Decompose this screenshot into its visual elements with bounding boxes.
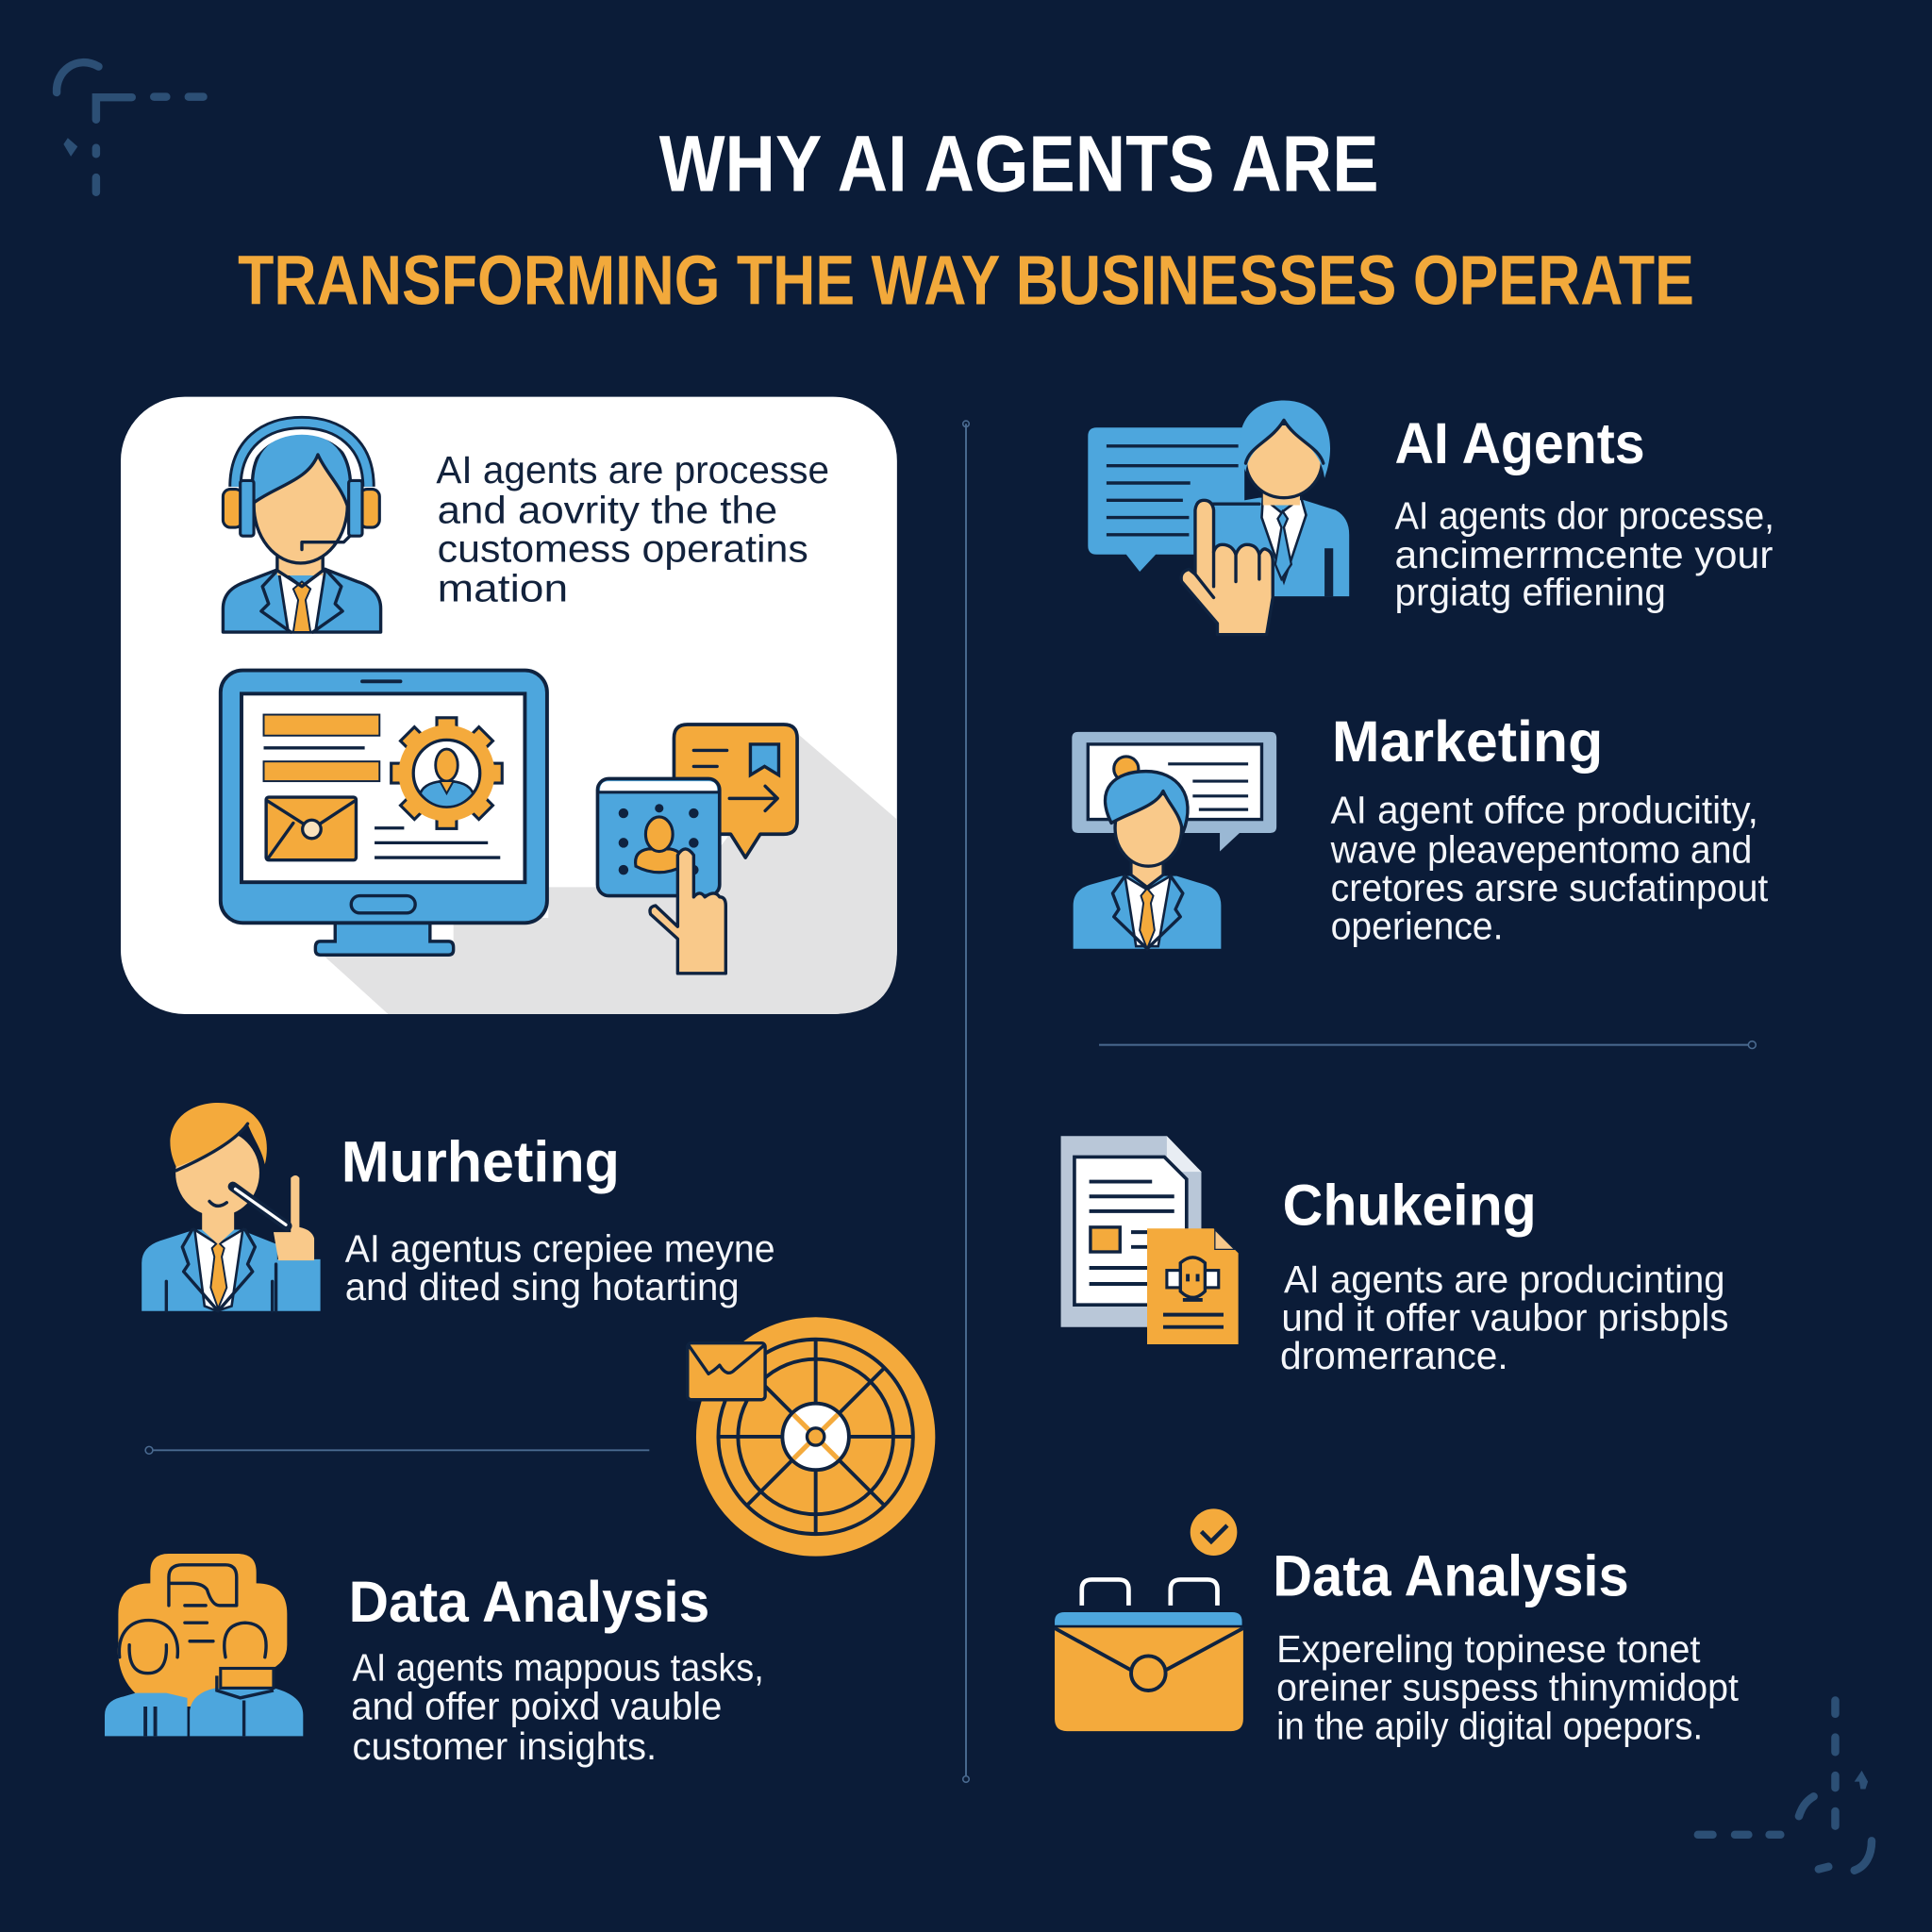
body text: and dited sing hotarting xyxy=(345,1265,740,1308)
body text: in the apily digital opepors. xyxy=(1276,1705,1703,1748)
body text: customer insights. xyxy=(353,1724,657,1768)
body text: operience. xyxy=(1331,904,1503,947)
body text: AI agentus crepiee meyne xyxy=(345,1226,775,1270)
card text: customess operatins xyxy=(438,527,808,571)
body text: cretores arsre sucfatinpout xyxy=(1331,866,1768,909)
vertical divider xyxy=(963,421,969,1782)
body text xyxy=(345,1226,775,1308)
body text: oreiner suspess thinymidopt xyxy=(1276,1665,1739,1708)
body text: prgiatg effiening xyxy=(1395,570,1666,613)
card text xyxy=(436,448,829,609)
card text: AI agents are processe xyxy=(436,448,829,491)
panel: Murheting xyxy=(142,1103,775,1311)
body text: AI agents mappous tasks, xyxy=(353,1646,764,1690)
icon: monitor xyxy=(221,671,547,955)
horizontal divider: right xyxy=(1099,1041,1756,1049)
card diagonal shadow xyxy=(323,734,897,1014)
body text: AI agent offce producitity, xyxy=(1331,788,1758,831)
body text: dromerrance. xyxy=(1280,1334,1508,1377)
icon: team with document xyxy=(105,1554,303,1736)
title xyxy=(238,118,1694,320)
heading: Chukeing xyxy=(1283,1173,1537,1238)
panel: AI Agents xyxy=(1088,400,1774,635)
body text: and offer poixd vauble xyxy=(351,1685,722,1728)
decorative corner: bottom right xyxy=(1698,1700,1872,1871)
icon: agent with speech bubble and hand xyxy=(1088,400,1349,635)
body text: wave pleavepentomo and xyxy=(1330,827,1752,871)
body text: ancimerrmcente your xyxy=(1395,533,1774,576)
body text xyxy=(1330,788,1768,947)
title: TRANSFORMING THE WAY BUSINESSES OPERATE xyxy=(238,242,1694,320)
body text xyxy=(1280,1257,1728,1377)
body text xyxy=(351,1646,764,1768)
panel: Chukeing xyxy=(1061,1136,1728,1377)
body text xyxy=(1395,493,1774,613)
panel: white overview card xyxy=(121,397,897,1014)
body text: AI agents are producinting xyxy=(1284,1257,1725,1301)
icon: orange chat bubble xyxy=(674,724,797,858)
body text: AI agents dor processe, xyxy=(1395,493,1774,537)
heading: Data Analysis xyxy=(349,1570,709,1635)
heading: Data Analysis xyxy=(1273,1543,1629,1608)
body text: Expereling topinese tonet xyxy=(1276,1627,1700,1671)
body text: und it offer vaubor prisbpls xyxy=(1281,1296,1728,1340)
title: WHY AI AGENTS ARE xyxy=(659,118,1379,208)
card text: and aovrity the the xyxy=(438,488,777,531)
heading: Marketing xyxy=(1332,709,1603,774)
gear with person xyxy=(391,718,502,828)
panel: Data Analysis right xyxy=(1055,1508,1739,1748)
panel: Data Analysis left xyxy=(105,1554,764,1768)
icon: briefcase envelope with check xyxy=(1055,1508,1243,1731)
panel: Marketing xyxy=(1072,709,1768,949)
icon: businessman pointing xyxy=(142,1103,321,1311)
heading: Murheting xyxy=(341,1130,620,1195)
icon: presenter with screen xyxy=(1072,732,1276,949)
icon: headset agent xyxy=(223,423,381,632)
decorative corner: top left xyxy=(57,62,204,192)
icon: tablet with hand xyxy=(597,778,725,974)
icon: documents xyxy=(1061,1136,1239,1344)
body text xyxy=(1276,1627,1739,1748)
icon: target wheel with envelope xyxy=(688,1317,935,1557)
horizontal divider: left xyxy=(145,1446,649,1454)
card text: mation xyxy=(438,566,568,609)
heading: AI Agents xyxy=(1395,411,1645,476)
